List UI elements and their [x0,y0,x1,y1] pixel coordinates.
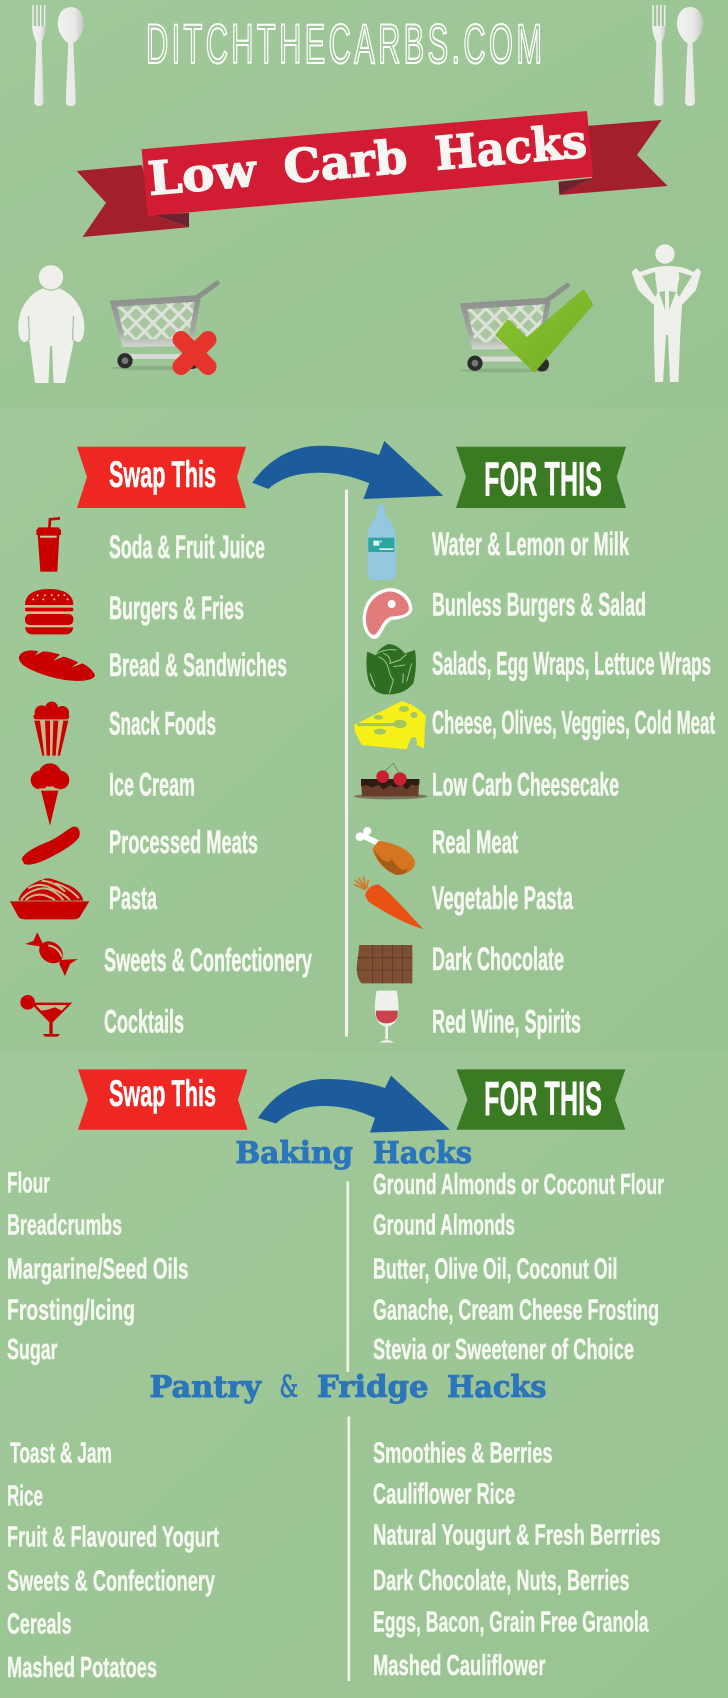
item: ice cream: Ice Cream [109,767,195,803]
item: mashed potatoes: Mashed Potatoes [7,1652,157,1684]
icon: soda cup [36,518,61,572]
icon: wrapped sweet [25,932,78,976]
for this banner 2 [456,1069,625,1130]
icon: shopping cart with red cross [110,283,217,370]
background: baking and pantry section [0,1053,728,1698]
icon: cheese wedge [354,701,426,749]
item: rice: Rice [7,1480,43,1512]
baking replacement list [373,1169,664,1366]
swap list: food items [104,529,312,1039]
divider: baking [346,1181,349,1372]
red cross [181,340,208,366]
item: flour: Flour [7,1168,50,1200]
pantry swap list [7,1437,219,1684]
heading: pantry and fridge hacks [150,1370,546,1405]
item: dark chocolate: Dark Chocolate [432,941,564,977]
green check mark [497,291,592,370]
item: flavoured yogurt: Fruit & Flavoured Yogurt [7,1522,219,1554]
item: toast and jam: Toast & Jam [10,1437,112,1469]
icon: healthy person with child on shoulders [632,244,701,382]
ribbon left tail [77,165,189,237]
title text [146,114,589,206]
title text: Carb [281,130,409,194]
title text: Low [146,143,260,206]
item: sweets: Sweets & Confectionery [104,942,312,978]
arrow 1 [252,441,443,499]
icon: sausage [22,827,80,865]
background: header section [0,0,728,408]
item: burgers: Burgers & Fries [109,590,244,626]
item: soda: Soda & Fruit Juice [109,529,265,565]
site name heading: DITCHTHECARBS.COM [146,12,542,75]
item: pasta: Pasta [109,880,157,916]
item: bread: Bread & Sandwiches [109,647,287,683]
swap this banner 1: Swap This [109,454,216,495]
divider: pantry [348,1416,350,1681]
icon: popcorn [33,702,69,756]
swap this banner 1 [77,447,246,508]
item: real meat: Real Meat [432,824,518,860]
icon: wine glass [375,991,399,1043]
heading: baking hacks [235,1136,472,1171]
icon: carrot [354,877,423,929]
icon: right cutlery [652,5,703,106]
title ribbon [77,111,668,237]
heading: baking hacks: Baking [235,1136,353,1171]
icon: cake with cherries [354,763,427,799]
swap this banner 2: Swap This [109,1073,216,1114]
icon: chicken drumstick [356,827,415,875]
item: mashed cauliflower: Mashed Cauliflower [373,1650,546,1682]
item: breadcrumbs: Breadcrumbs [7,1210,122,1242]
icon: shopping cart with green check [460,286,592,372]
item: red wine: Red Wine, Spirits [432,1003,581,1039]
for this banner 1 [456,447,626,508]
icon: ice cream cone [31,763,69,826]
baking swap list [7,1168,188,1366]
divider 1 [345,490,348,1037]
ribbon right tail [559,120,668,195]
heading: pantry and fridge hacks: Pantry [150,1370,263,1405]
item: vegetable pasta: Vegetable Pasta [432,880,573,916]
for this banner 2: FOR THIS [484,1073,602,1126]
item: margarine: Margarine/Seed Oils [7,1254,188,1286]
icon: left cutlery [32,5,84,106]
icon: burger [25,589,73,634]
background: food swaps section [0,408,728,1053]
heading: pantry and fridge hacks: & [280,1370,298,1405]
heading: pantry and fridge hacks: Fridge [317,1370,428,1405]
item: smoothies: Smoothies & Berries [373,1437,552,1469]
for this banner 1: FOR THIS [484,454,602,507]
icon: pasta bowl [10,878,89,919]
item: snack foods: Snack Foods [109,706,216,742]
item: cereals: Cereals [7,1608,72,1640]
swap this banner 2 [78,1069,248,1130]
icon: overweight person [18,264,84,383]
ribbon folds [155,178,592,227]
icon: bread loaf [19,650,95,681]
icon: water bottle [367,505,396,580]
item: cauliflower rice: Cauliflower Rice [373,1478,515,1510]
heading: baking hacks: Hacks [373,1136,472,1171]
icon: steak [363,588,412,639]
item: frosting: Frosting/Icing [7,1294,135,1326]
item: sugar: Sugar [7,1334,58,1366]
icon: cocktail glass [20,995,72,1037]
item: cocktails: Cocktails [104,1003,184,1039]
title text: Hacks [433,114,589,181]
item: sweets: Sweets & Confectionery [7,1566,215,1598]
icon: chocolate bar [357,945,412,983]
pantry replacement list [373,1437,661,1682]
heading: pantry and fridge hacks: Hacks [447,1370,546,1405]
item: ground almonds: Ground Almonds [373,1210,515,1242]
arrow 2 [258,1076,450,1133]
ribbon main band [142,111,593,216]
replacement list: food items [432,526,715,1039]
icon: lettuce [366,644,416,694]
item: processed meats: Processed Meats [109,824,258,860]
